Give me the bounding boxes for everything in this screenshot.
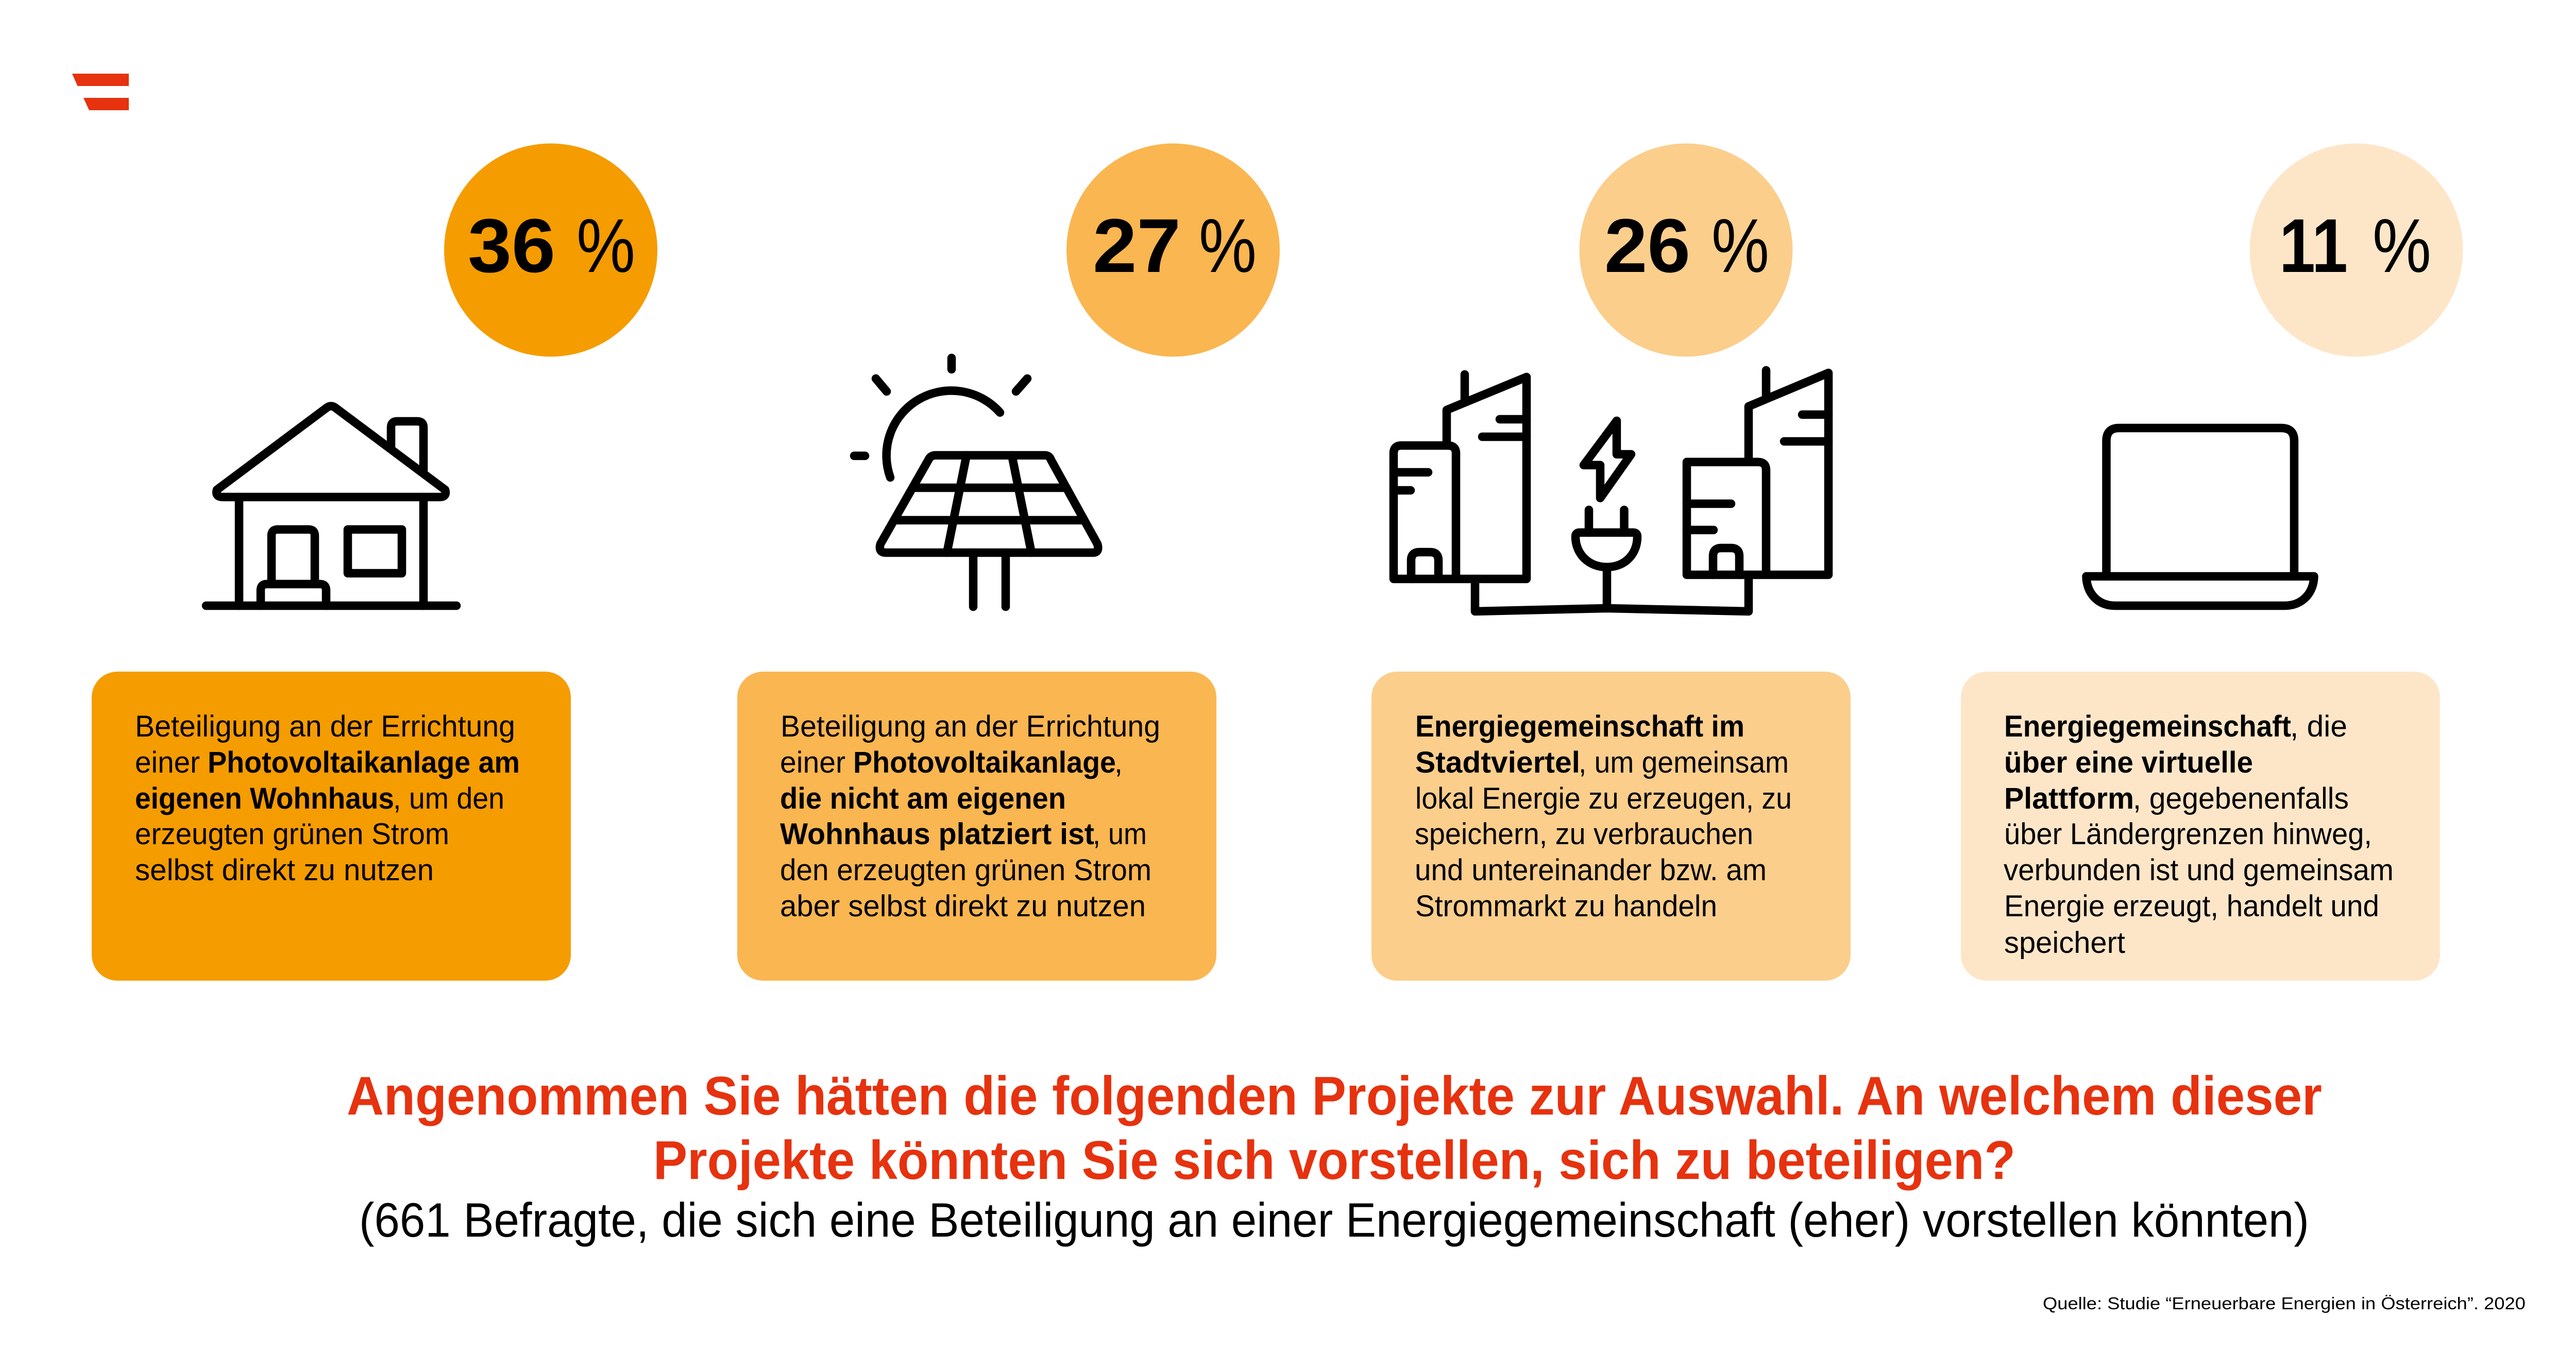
percentage badge 11 % — [2249, 143, 2463, 356]
card: nicht am Wohnhaus: die nicht am eigenen — [780, 782, 1066, 815]
icon: house — [206, 406, 456, 606]
card: virtuelle Plattform: über eine virtuelle — [2004, 746, 2253, 779]
card: Stadtviertel: lokal Energie zu erzeugen, zu — [1415, 782, 1792, 815]
percentage badge 27 %: % — [1199, 203, 1257, 288]
panel: 36 percent — [92, 143, 657, 981]
percentage badge 36 % — [444, 143, 657, 356]
card: Stadtviertel: Energiegemeinschaft im — [1415, 710, 1744, 743]
card: nicht am Wohnhaus: Photovoltaikanlage — [853, 746, 1116, 779]
heading: question: Projekte könnten Sie sich vorstellen, sich zu beteiligen? — [653, 1130, 2015, 1191]
card: virtuelle Plattform: Energiegemeinschaft — [2004, 710, 2291, 743]
card: nicht am Wohnhaus: Beteiligung an der Errichtung — [781, 710, 1160, 743]
card: virtuelle Plattform: über Ländergrenzen hinweg, — [2004, 817, 2372, 851]
card: Wohnhaus: selbst direkt zu nutzen — [135, 853, 434, 887]
percentage badge 36 %: % — [577, 203, 635, 288]
card: Stadtviertel: , um gemeinsam — [1579, 746, 1789, 779]
card: nicht am Wohnhaus: , — [1114, 746, 1123, 779]
card: nicht am Wohnhaus: , um — [1093, 817, 1147, 851]
icon: laptop — [2087, 428, 2314, 606]
subheading: respondents: (661 Befragte, die sich eine Beteiligung an einer Energiegemeinschaft (eher) vorstellen könnten) — [359, 1193, 2309, 1247]
panel: 11 percent — [1961, 143, 2463, 981]
card: virtuelle Plattform: Plattform — [2004, 782, 2134, 815]
percentage badge 26 %: 26 — [1604, 203, 1690, 288]
card: Stadtviertel: und untereinander bzw. am — [1415, 853, 1767, 887]
card: virtuelle Plattform: speichert — [2004, 926, 2125, 960]
panel: 26 percent — [1371, 143, 1851, 981]
card: virtuelle Plattform: Energie erzeugt, handelt und — [2004, 889, 2379, 923]
icon: city buildings with plug — [1394, 370, 1828, 611]
card: Wohnhaus: Photovoltaikanlage am — [208, 746, 520, 779]
card: Wohnhaus: einer — [135, 746, 200, 779]
panel: 27 percent — [737, 143, 1280, 981]
card: nicht am Wohnhaus: aber selbst direkt zu nutzen — [780, 889, 1146, 923]
card: nicht am Wohnhaus: Wohnhaus platziert ist — [780, 817, 1094, 851]
card: Stadtviertel: Stadtviertel — [1415, 746, 1580, 779]
card: Wohnhaus: Beteiligung an der Errichtung — [135, 710, 515, 743]
percentage badge 26 % — [1580, 143, 1793, 356]
percentage badge 26 %: % — [1711, 203, 1769, 288]
card: nicht am Wohnhaus: einer — [780, 746, 845, 779]
card: Stadtviertel: Strommarkt zu handeln — [1415, 889, 1717, 923]
card: Wohnhaus — [92, 672, 571, 981]
source note: Quelle: Studie “Erneuerbare Energien in Österreich”. 2020 — [2043, 1294, 2526, 1313]
percentage badge 11 %: 11 — [2279, 203, 2348, 288]
icon: solar panel with sun — [854, 358, 1098, 607]
card: virtuelle Plattform: , die — [2290, 710, 2347, 743]
heading: question: Angenommen Sie hätten die folgenden Projekte zur Auswahl. An welchem dieser — [347, 1066, 2322, 1126]
card: Stadtviertel: speichern, zu verbrauchen — [1415, 817, 1753, 851]
card: Wohnhaus: eigenen Wohnhaus — [135, 782, 394, 815]
logo: red stripes — [72, 74, 129, 110]
percentage badge 11 %: % — [2372, 203, 2431, 288]
percentage badge 27 %: 27 — [1093, 203, 1181, 288]
card: virtuelle Plattform — [1961, 672, 2440, 981]
card: Stadtviertel — [1371, 672, 1851, 981]
percentage badge 36 %: 36 — [468, 203, 555, 288]
card: nicht am Wohnhaus: den erzeugten grünen Strom — [780, 853, 1151, 887]
card: Wohnhaus: erzeugten grünen Strom — [135, 817, 449, 851]
card: virtuelle Plattform: verbunden ist und gemeinsam — [2004, 853, 2394, 887]
percentage badge 27 % — [1066, 143, 1280, 356]
card: Wohnhaus: , um den — [393, 782, 504, 815]
heading: question — [347, 1066, 2322, 1191]
card: nicht am Wohnhaus — [737, 672, 1216, 981]
card: virtuelle Plattform: , gegebenenfalls — [2133, 782, 2349, 815]
